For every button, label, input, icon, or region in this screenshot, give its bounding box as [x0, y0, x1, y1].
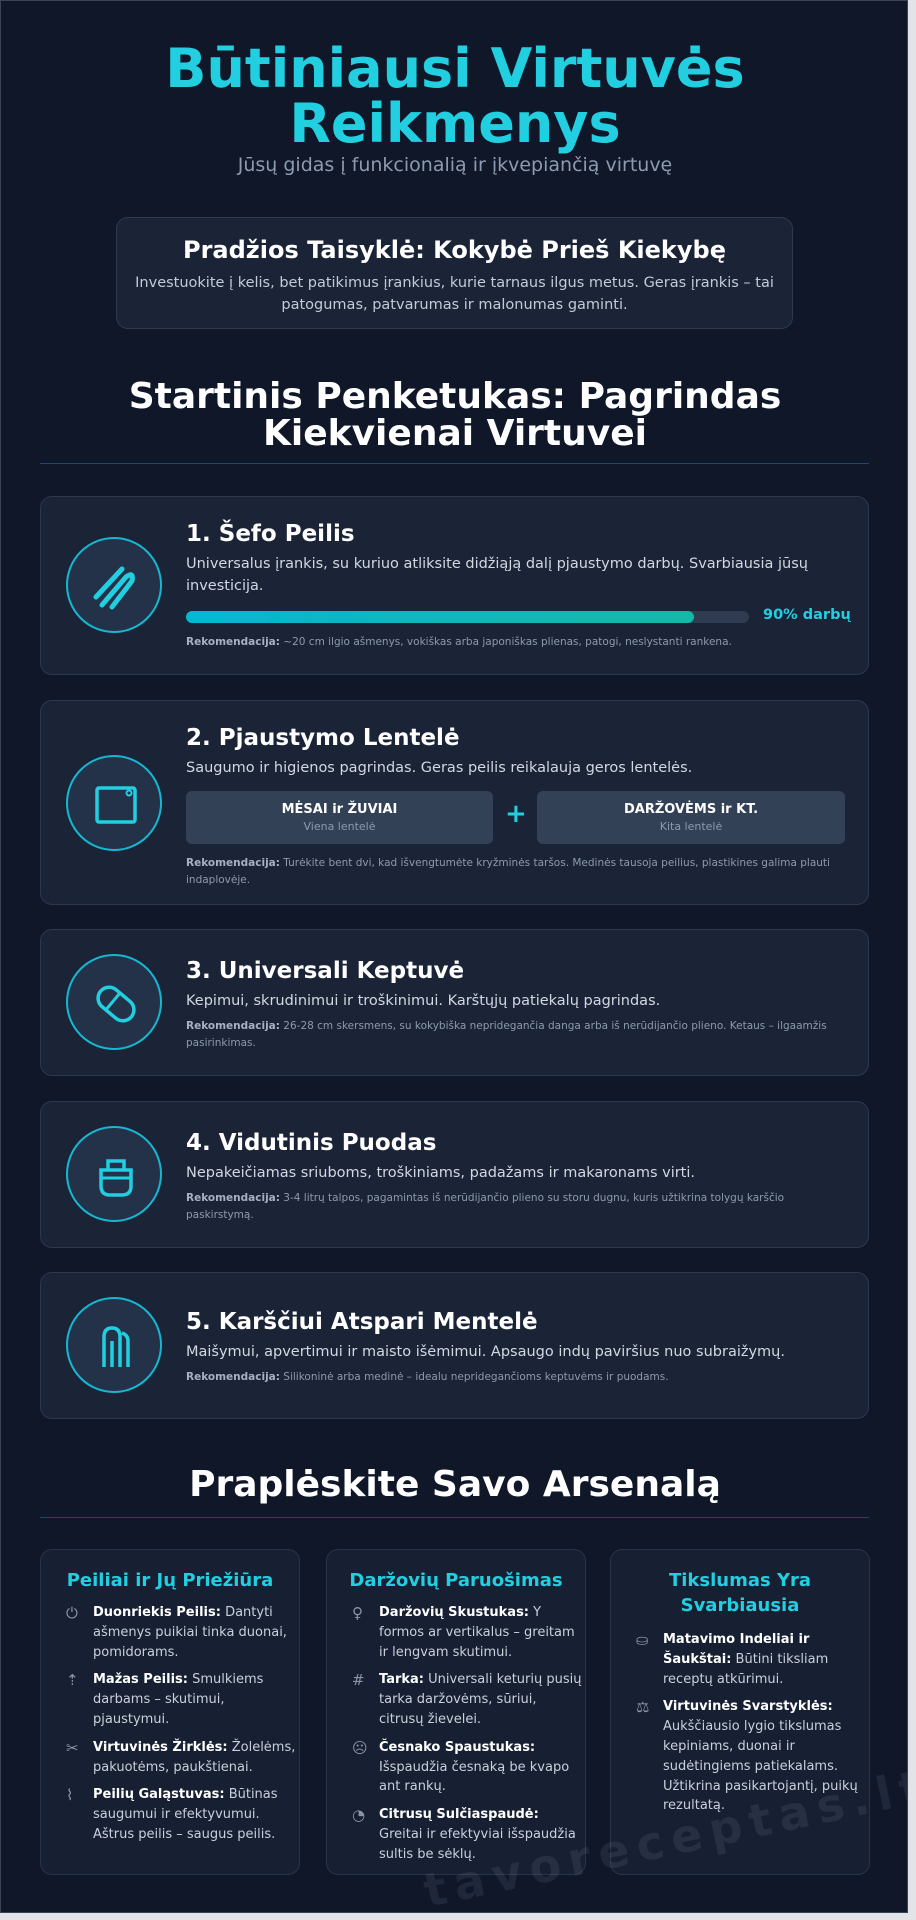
panel: precision	[610, 1549, 870, 1875]
item: peeler: ♀	[352, 1604, 363, 1622]
card 5: spatula	[40, 1272, 869, 1419]
item: juicer: ◔	[352, 1806, 365, 1824]
card 2: cutting board	[40, 700, 869, 905]
boards comparison: +	[505, 799, 527, 829]
heading: expand arsenal: Praplėskite Savo Arsenalą	[189, 1464, 721, 1505]
item: measuring cups: ⛀	[636, 1631, 649, 1649]
item: juicer: Citrusų Sulčiaspaudė: Greitai ir efektyviai išspaudžia sultis be sėklų.	[379, 1807, 576, 1862]
boards comparison: MĖSAI ir ŽUVIAI	[282, 802, 397, 817]
item: garlic press: Česnako Spaustukas: Išspaudžia česnaką be kvapo ant rankų.	[379, 1740, 569, 1794]
card 1: chef knife	[40, 496, 869, 675]
panel: rule box: Investuokite į kelis, bet patikimus įrankius, kurie tarnaus ilgus metus. Geras įrankis – tai patogumas, patvarumas ir malonumas gaminti.	[135, 275, 774, 313]
panel: precision: Svarbiausia	[681, 1595, 799, 1616]
subtitle: Jūsų gidas į funkcionalią ir įkvepiančią virtuvę	[238, 154, 672, 176]
item: small knife: ⇡	[66, 1671, 79, 1689]
item: bread knife: Duonriekis Peilis: Dantyti ašmenys puikiai tinka duonai, pomidorams.	[93, 1605, 287, 1660]
heading: starter five	[129, 376, 781, 454]
item: bread knife: ⏻	[66, 1604, 78, 1622]
item: scale: Virtuvinės Svarstyklės: Aukščiausio lygio tikslumas kepiniams, duonai ir sudėtingiems patiekalams. Užtikrina pasikartojantį, puikų rezultatą.	[663, 1699, 858, 1813]
card 3: pan: 3. Universali Keptuvė	[186, 958, 464, 984]
item: sharpener: Peilių Galąstuvas: Būtinas saugumui ir efektyvumui. Aštrus peilis – saugus peilis.	[93, 1787, 278, 1842]
title: Būtiniausi Virtuvės	[165, 37, 745, 100]
item: garlic press: ☹	[352, 1739, 368, 1757]
panel: knives	[40, 1549, 300, 1875]
card 4: pot	[40, 1101, 869, 1248]
icon: pan	[66, 954, 162, 1050]
panel: rule box: Pradžios Taisyklė: Kokybė Prieš Kiekybę	[183, 236, 726, 264]
panel: vegetables: Daržovių Paruošimas	[349, 1570, 563, 1591]
card 5: spatula: 5. Karščiui Atspari Mentelė	[186, 1309, 538, 1335]
panel: vegetables	[326, 1549, 586, 1875]
card 1: chef knife: Universalus įrankis, su kuriuo atliksite didžiąją dalį pjaustymo darbų. Svarbiausia jūsų investicija.	[186, 556, 808, 594]
item: grater: Tarka: Universali keturių pusių tarka daržovėms, sūriui, citrusų žievelei.	[379, 1672, 581, 1727]
card 3: pan: Rekomendacija: 26-28 cm skersmens, su kokybiška nepridegančia danga arba iš nerūdijančio plieno. Ketaus – ilgaamžis pasirinkimas.	[186, 1020, 827, 1049]
item: measuring cups: Matavimo Indeliai ir Šaukštai: Būtini tiksliam receptų atkūrimui.	[663, 1632, 828, 1687]
heading: starter five: Startinis Penketukas: Pagrindas	[129, 376, 781, 417]
card 4: pot: 4. Vidutinis Puodas	[186, 1130, 436, 1156]
bar chart: 90%: 90% darbų	[763, 607, 851, 623]
item: sharpener: ⌇	[66, 1786, 73, 1804]
card 2: cutting board: 2. Pjaustymo Lentelė	[186, 725, 460, 751]
icon: board	[66, 755, 162, 851]
card 4: pot: Nepakeičiamas sriuboms, troškiniams, padažams ir makaronams virti.	[186, 1165, 695, 1181]
item: peeler: Daržovių Skustukas: Y formos ar vertikalus – greitam ir lengvam skutimui.	[379, 1605, 575, 1660]
card 3: pan	[40, 929, 869, 1076]
boards comparison: DARŽOVĖMS ir KT.	[624, 802, 758, 817]
panel: rule box	[116, 217, 793, 329]
icon: pot	[66, 1126, 162, 1222]
item: scissors: Virtuvinės Žirklės: Žolelėms, pakuotėms, paukštienai.	[93, 1740, 295, 1775]
card 2: cutting board: Saugumo ir higienos pagrindas. Geras peilis reikalauja geros lentelės.	[186, 760, 692, 776]
card 5: spatula: Maišymui, apvertimui ir maisto išėmimui. Apsaugo indų paviršius nuo subraižymų.	[186, 1344, 785, 1360]
card 2: cutting board: Rekomendacija: Turėkite bent dvi, kad išvengtumėte kryžminės taršos. Medinės tausoja peilius, plastikines galima plauti indaplovėje.	[186, 857, 830, 886]
bar chart: 90%	[186, 607, 851, 623]
boards comparison	[186, 791, 845, 844]
icon: knife	[66, 537, 162, 633]
item: grater: #	[352, 1671, 365, 1689]
panel: knives: Peiliai ir Jų Priežiūra	[67, 1570, 273, 1591]
item: scale: ⚖	[636, 1698, 649, 1716]
title	[165, 37, 745, 155]
item: small knife: Mažas Peilis: Smulkiems darbams – skutimui, pjaustymui.	[93, 1672, 263, 1727]
boards comparison: Viena lentelė	[303, 820, 376, 833]
item: scissors: ✂	[66, 1739, 79, 1757]
card 1: chef knife: Rekomendacija: ~20 cm ilgio ašmenys, vokiškas arba japoniškas plienas, patogi, neslystanti rankena.	[186, 636, 732, 648]
card 3: pan: Kepimui, skrudinimui ir troškinimui. Karštųjų patiekalų pagrindas.	[186, 993, 660, 1009]
card 1: chef knife: 1. Šefo Peilis	[186, 521, 355, 547]
icon: spatula	[66, 1297, 162, 1393]
boards comparison: Kita lentelė	[660, 820, 722, 833]
card 4: pot: Rekomendacija: 3-4 litrų talpos, pagamintas iš nerūdijančio plieno su storu dugnu, kuris užtikrina tolygų karščio paskirstymą.	[186, 1192, 784, 1221]
title: Reikmenys	[289, 92, 621, 155]
panel: precision: Tikslumas Yra	[669, 1570, 811, 1591]
heading: starter five: Kiekvienai Virtuvei	[263, 413, 647, 454]
card 5: spatula: Rekomendacija: Silikoninė arba medinė – idealu nepridegančioms keptuvėms ir puodams.	[186, 1371, 669, 1383]
